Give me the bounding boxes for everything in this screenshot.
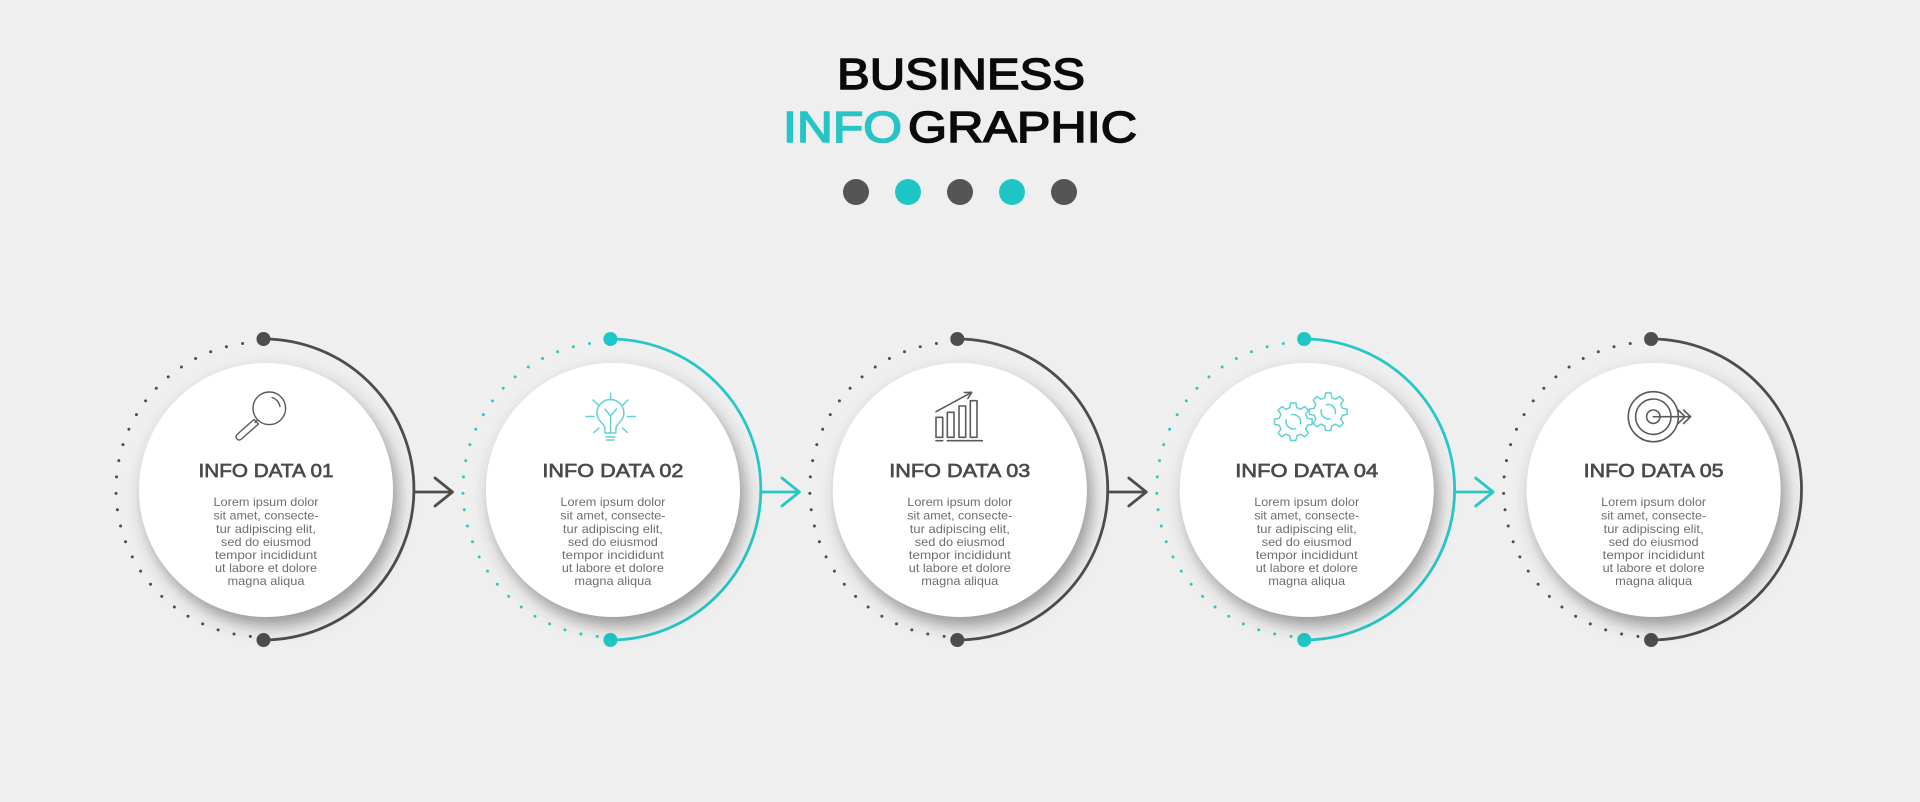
title dots	[843, 179, 1077, 205]
solid arc	[957, 339, 1108, 640]
arrow	[1456, 478, 1493, 506]
body text: magna aliqua	[228, 575, 305, 588]
arrow	[762, 478, 799, 506]
body text: ut labore et dolore	[1603, 562, 1705, 575]
icon: target	[1628, 392, 1691, 442]
body text: ut labore et dolore	[562, 562, 664, 575]
body text: Lorem ipsum dolor	[560, 496, 666, 509]
icon: gears	[1274, 393, 1347, 441]
body text: Lorem ipsum dolor	[907, 496, 1012, 509]
icon: magnifier	[236, 392, 286, 440]
panel: info data 03	[810, 332, 1146, 647]
body text: ut labore et dolore	[1256, 562, 1358, 575]
body text: tempor incididunt	[1256, 549, 1359, 562]
body text: sit amet, consecte-	[907, 510, 1012, 522]
body text: ut labore et dolore	[215, 562, 317, 575]
white circle	[486, 363, 740, 617]
body text: Lorem ipsum dolor	[1601, 496, 1706, 509]
body text: tempor incididunt	[562, 549, 665, 562]
arrow	[1109, 478, 1146, 506]
white circle	[139, 363, 393, 617]
body text: magna aliqua	[921, 575, 999, 588]
body text: Lorem ipsum dolor	[1254, 496, 1359, 509]
body text: tur adipiscing elit,	[216, 523, 316, 536]
dotted arc	[810, 342, 957, 637]
solid arc	[1304, 339, 1455, 640]
body text: ut labore et dolore	[909, 562, 1011, 575]
white circle	[833, 363, 1087, 617]
solid arc	[264, 339, 414, 640]
solid arc	[610, 339, 761, 640]
heading: INFO DATA 04	[1235, 460, 1378, 481]
body text	[907, 496, 1012, 588]
body text	[560, 496, 666, 588]
title: GRAPHIC	[908, 103, 1137, 152]
arrow	[415, 478, 452, 506]
body text: sed do eiusmod	[915, 536, 1005, 549]
solid arc	[1651, 339, 1802, 640]
arc end dots	[950, 332, 964, 647]
white circle	[1527, 363, 1781, 617]
body text: sit amet, consecte-	[214, 510, 319, 522]
body text	[1254, 496, 1359, 588]
body text: tempor incididunt	[215, 549, 318, 562]
body text: sed do eiusmod	[1609, 536, 1699, 549]
heading: INFO DATA 01	[198, 460, 334, 481]
arc end dots	[256, 332, 270, 647]
body text: sit amet, consecte-	[1254, 510, 1359, 522]
body text: sed do eiusmod	[221, 536, 311, 549]
title: INFO	[783, 103, 902, 152]
body text: tempor incididunt	[1603, 549, 1705, 562]
body text	[1601, 496, 1706, 588]
body text: tur adipiscing elit,	[1604, 523, 1704, 536]
dotted arc	[1504, 342, 1651, 637]
arc end dots	[603, 332, 617, 647]
body text: tur adipiscing elit,	[1257, 523, 1357, 536]
dotted arc	[463, 342, 610, 637]
heading: INFO DATA 03	[889, 460, 1030, 481]
icon: bar chart	[936, 392, 982, 441]
body text: magna aliqua	[1615, 575, 1693, 588]
body text: tempor incididunt	[909, 549, 1012, 562]
body text: sit amet, consecte-	[560, 510, 666, 522]
title	[783, 50, 1137, 152]
arc end dots	[1297, 332, 1311, 647]
body text: magna aliqua	[574, 575, 652, 588]
body text: magna aliqua	[1268, 575, 1346, 588]
heading: INFO DATA 05	[1584, 460, 1724, 481]
dotted arc	[1157, 342, 1304, 637]
icon: light bulb	[586, 393, 635, 440]
dotted arc	[116, 342, 263, 637]
panel: info data 04	[1157, 332, 1493, 647]
body text: sed do eiusmod	[568, 536, 658, 549]
panel: info data 05	[1504, 332, 1802, 647]
panel: info data 01	[116, 332, 452, 647]
body text: tur adipiscing elit,	[910, 523, 1010, 536]
body text: tur adipiscing elit,	[563, 523, 663, 536]
body text	[214, 496, 319, 588]
body text: sed do eiusmod	[1262, 536, 1352, 549]
body text: Lorem ipsum dolor	[214, 496, 319, 509]
arc end dots	[1644, 332, 1658, 647]
panel: info data 02	[463, 332, 799, 647]
title: BUSINESS	[837, 50, 1085, 99]
body text: sit amet, consecte-	[1601, 510, 1706, 522]
white circle	[1180, 363, 1434, 617]
heading: INFO DATA 02	[542, 460, 683, 481]
